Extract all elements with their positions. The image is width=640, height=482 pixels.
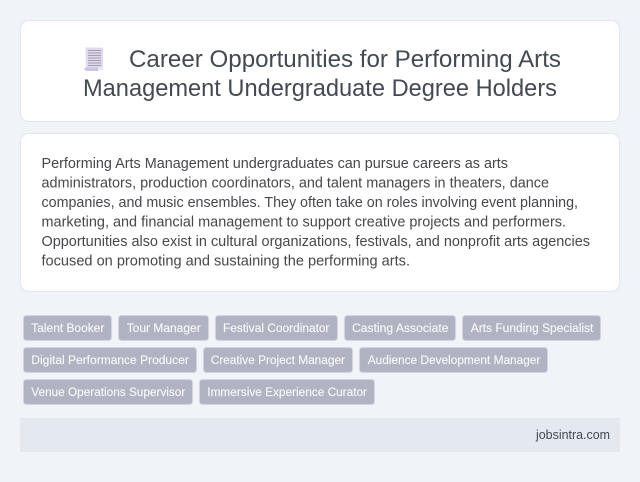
heading: Management Undergraduate Degree Holders bbox=[83, 75, 557, 102]
tag list: related careers bbox=[24, 316, 600, 404]
tag: Tour Manager: Tour Manager bbox=[127, 321, 201, 335]
text block: description: Opportunities also exist in cultural organizations, festivals, and nonprofit arts agencies bbox=[42, 234, 590, 250]
tag: Casting Associate bbox=[344, 316, 456, 340]
tag: Arts Funding Specialist: Arts Funding Specialist bbox=[471, 321, 594, 335]
tag: Immersive Experience Curator bbox=[200, 380, 374, 404]
tag: Creative Project Manager bbox=[204, 348, 352, 372]
text block: description: administrators, production coordinators, and talent managers in theaters, dance bbox=[42, 176, 549, 192]
tag: Tour Manager bbox=[118, 316, 208, 340]
panel: title card bbox=[20, 20, 620, 122]
footer bar bbox=[20, 418, 620, 452]
panel: description card bbox=[20, 134, 620, 292]
tag: Talent Booker: Talent Booker bbox=[31, 321, 104, 335]
text block: description bbox=[42, 156, 590, 270]
footer source text: jobsintra.com bbox=[535, 428, 610, 442]
tag: Venue Operations Supervisor bbox=[24, 380, 192, 404]
heading: Career Opportunities for Performing Arts bbox=[129, 46, 561, 73]
tag: Audience Development Manager: Audience Development Manager bbox=[368, 353, 540, 367]
heading bbox=[83, 46, 561, 102]
tag: Creative Project Manager: Creative Project Manager bbox=[211, 353, 345, 367]
tag: Venue Operations Supervisor: Venue Operations Supervisor bbox=[31, 385, 185, 399]
tag: Audience Development Manager bbox=[360, 348, 548, 372]
icon: paper scroll document bbox=[84, 48, 103, 71]
text block: description: focused on promoting and sustaining the performing arts. bbox=[42, 254, 410, 270]
tag: Arts Funding Specialist bbox=[462, 316, 600, 340]
tag: Digital Performance Producer bbox=[24, 348, 196, 372]
text block: description: companies, and music ensembles. They often take on roles involving event planning, bbox=[42, 195, 578, 211]
tag: Immersive Experience Curator: Immersive Experience Curator bbox=[207, 385, 367, 399]
tag: Festival Coordinator: Festival Coordinator bbox=[223, 321, 330, 335]
text block: description: marketing, and financial management to support creative projects and performers. bbox=[42, 214, 566, 230]
tag: Casting Associate: Casting Associate bbox=[352, 321, 449, 335]
text block: description: Performing Arts Management undergraduates can pursue careers as arts bbox=[42, 156, 508, 172]
tag: Festival Coordinator bbox=[216, 316, 338, 340]
tag: Talent Booker bbox=[24, 316, 112, 340]
tag: Digital Performance Producer: Digital Performance Producer bbox=[31, 353, 189, 367]
